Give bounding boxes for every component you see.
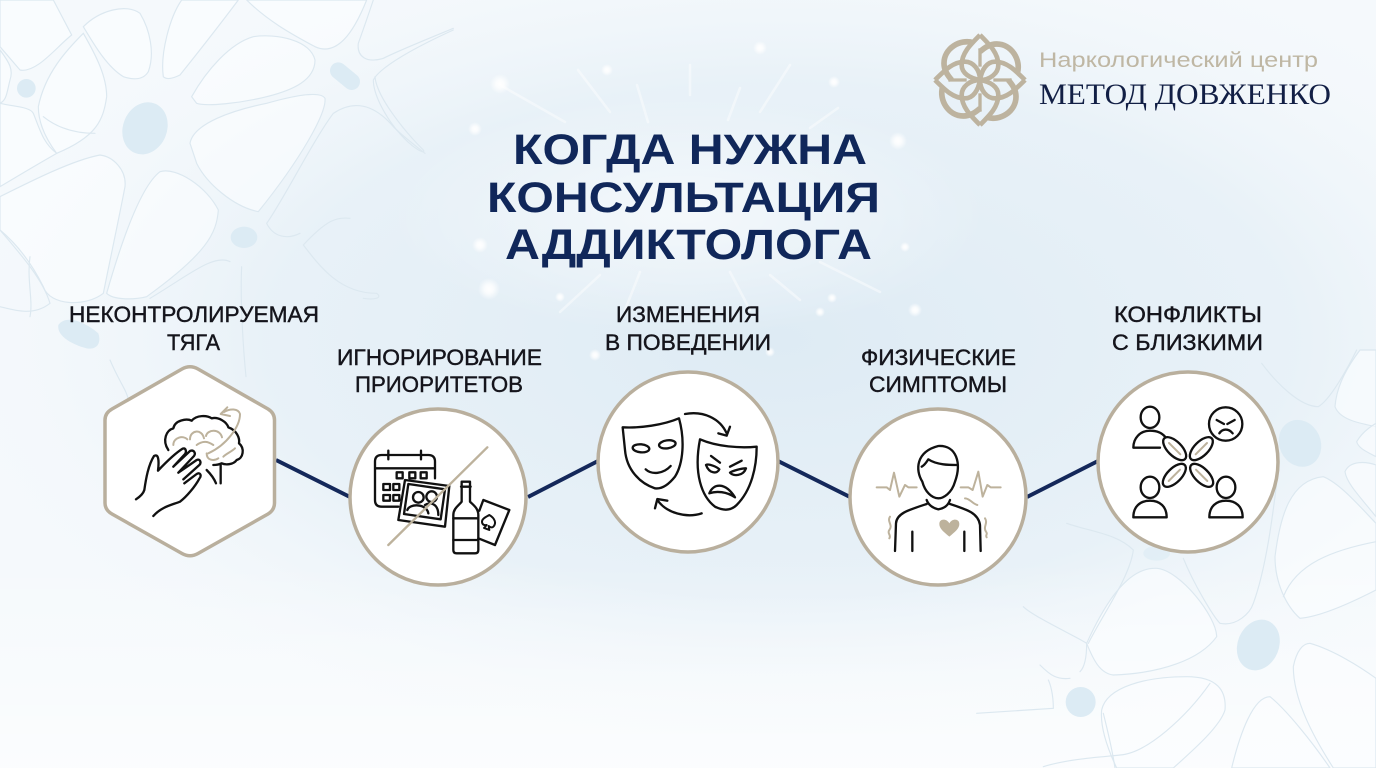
- icon: two theatre masks: [623, 413, 757, 515]
- logo: Метод Довженко: [935, 35, 1331, 125]
- logo name: МЕТОД ДОВЖЕНКО: [1039, 78, 1331, 111]
- title: КОНСУЛЬТАЦИЯ: [487, 174, 880, 222]
- label: ignoring priorities: [337, 345, 542, 397]
- step 5: conflicts with loved ones: [1098, 302, 1278, 552]
- label: physical symptoms: ФИЗИЧЕСКИЕ: [861, 345, 1016, 370]
- label: behaviour change: ИЗМЕНЕНИЯ: [616, 302, 760, 327]
- label: conflicts with loved ones: С БЛИЗКИМИ: [1112, 330, 1263, 355]
- connecting zigzag lines: [276, 460, 1098, 497]
- label: uncontrolled craving: [69, 302, 319, 355]
- label: conflicts with loved ones: [1112, 302, 1263, 355]
- circle frame: [850, 409, 1026, 585]
- logo subtitle: Наркологический центр: [1039, 49, 1318, 72]
- hexagon frame: [105, 367, 274, 556]
- title: [487, 126, 880, 269]
- step 4: physical symptoms: [850, 345, 1026, 585]
- step 3: behaviour change: [598, 302, 778, 552]
- label: ignoring priorities: ИГНОРИРОВАНИЕ: [337, 345, 542, 370]
- label: physical symptoms: [861, 345, 1016, 397]
- label: uncontrolled craving: НЕКОНТРОЛИРУЕМАЯ: [69, 302, 319, 327]
- icon: person with pulse and heart: [877, 446, 1001, 551]
- circle frame: [598, 372, 778, 552]
- label: ignoring priorities: ПРИОРИТЕТОВ: [355, 372, 523, 397]
- label: conflicts with loved ones: КОНФЛИКТЫ: [1114, 302, 1262, 327]
- icon: people with broken chain links: [1133, 407, 1243, 517]
- label: behaviour change: В ПОВЕДЕНИИ: [605, 330, 771, 355]
- icon: brain and hand: [136, 407, 243, 516]
- title: КОГДА НУЖНА: [513, 126, 867, 174]
- step 2: ignoring priorities: [337, 345, 542, 585]
- step 1: uncontrolled craving: [69, 302, 319, 556]
- label: behaviour change: [605, 302, 771, 355]
- circle frame: [350, 409, 526, 585]
- icon: gold knot emblem: [935, 35, 1025, 125]
- label: uncontrolled craving: ТЯГА: [167, 330, 220, 355]
- icon: calendar, photo, bottle and card crossed out: [375, 447, 509, 553]
- circle frame: [1098, 372, 1278, 552]
- title: АДДИКТОЛОГА: [505, 221, 872, 269]
- label: physical symptoms: СИМПТОМЫ: [869, 372, 1007, 397]
